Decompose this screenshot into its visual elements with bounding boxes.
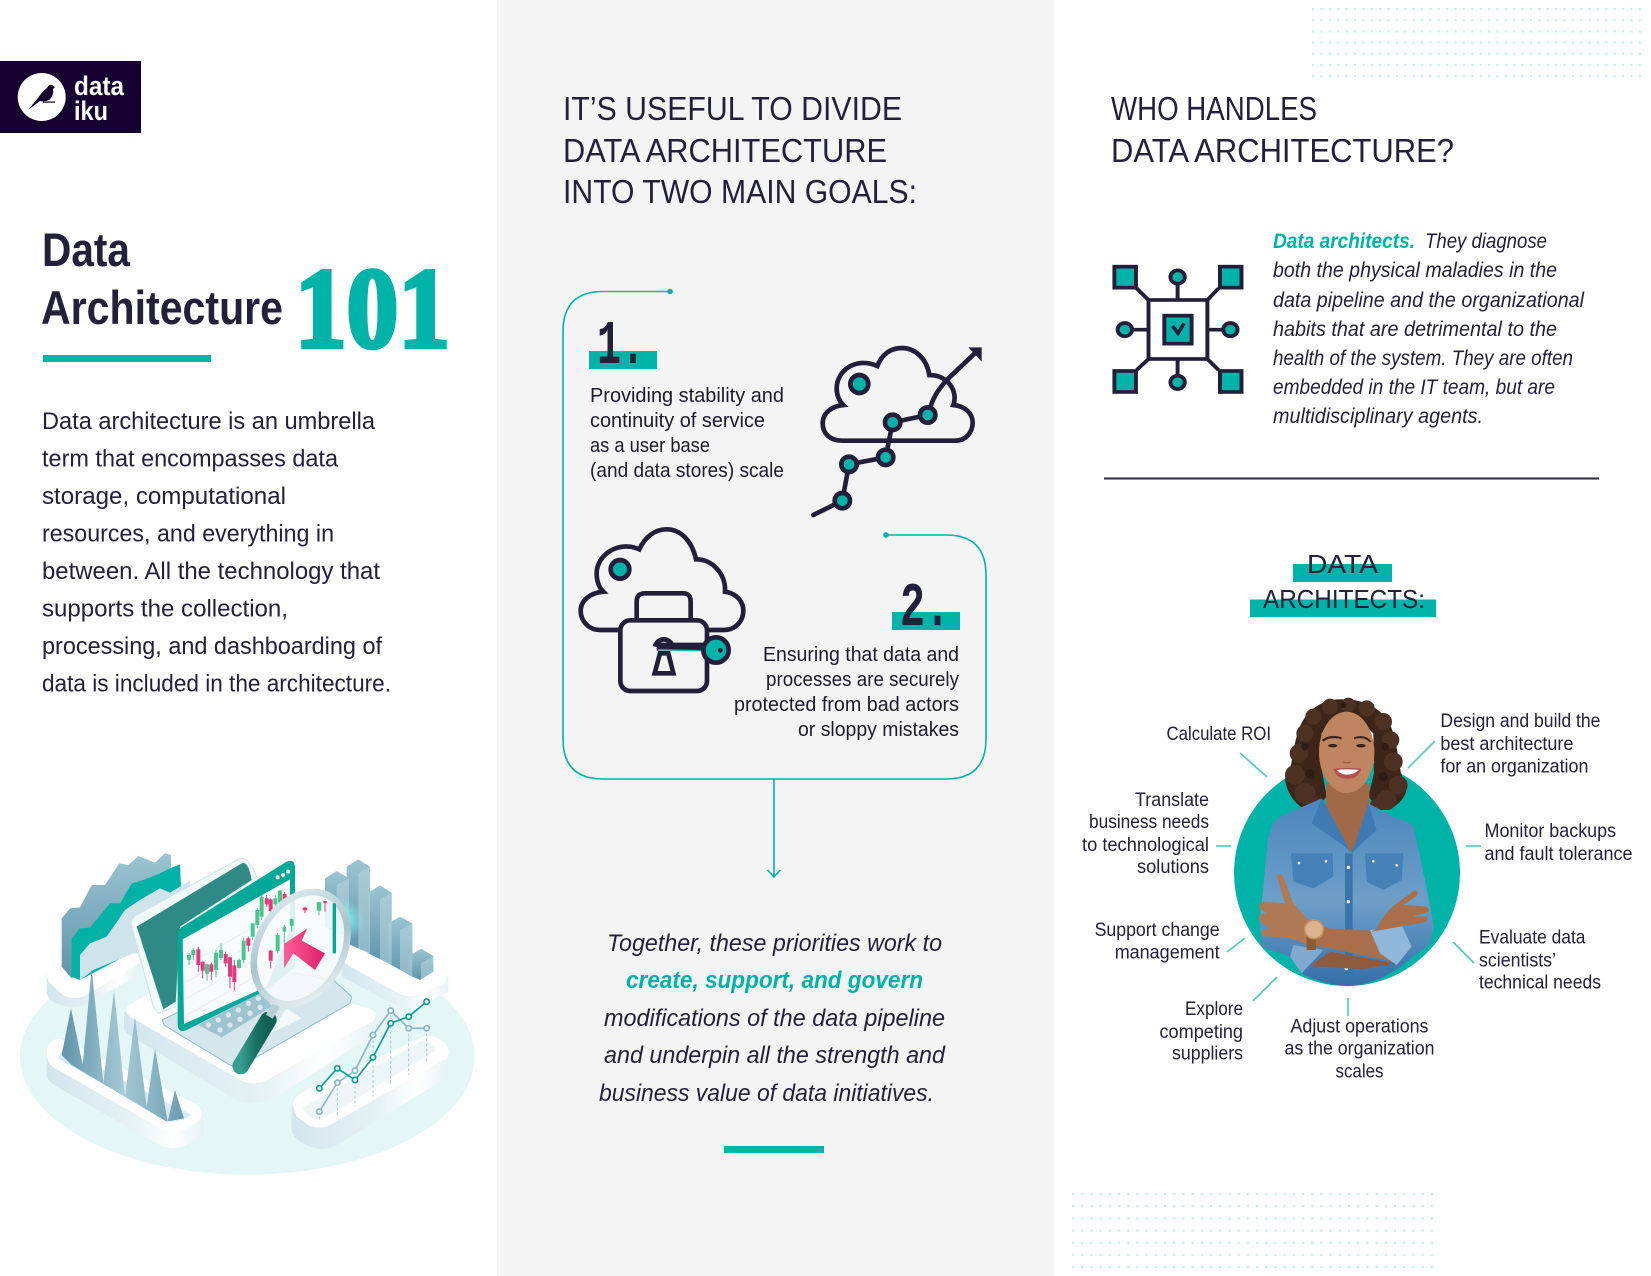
heading: two main goals xyxy=(563,91,917,211)
label: design and build: Design and build the xyxy=(1440,710,1600,732)
callout lines xyxy=(1216,741,1481,1016)
label: translate business needs: Translate xyxy=(1135,789,1209,811)
data architects description: multidisciplinary agents. xyxy=(1273,405,1483,428)
title xyxy=(41,223,450,372)
title: 101 xyxy=(295,245,450,372)
summary text: and underpin all the strength and xyxy=(604,1042,946,1069)
label: adjust operations: Adjust operations xyxy=(1290,1016,1429,1038)
label: translate business needs xyxy=(1082,789,1209,878)
panel: two main goals xyxy=(563,91,986,1153)
intro text: resources, and everything in xyxy=(42,520,334,548)
intro text: supports the collection, xyxy=(42,596,288,622)
portrait: data architect in teal circle xyxy=(1234,698,1460,986)
heading: data architects: ARCHITECTS: xyxy=(1263,584,1425,614)
label: explore competing suppliers: Explore xyxy=(1185,998,1243,1020)
summary text xyxy=(599,930,946,1107)
title: Architecture xyxy=(41,281,283,334)
icon: cloud with rising line xyxy=(813,347,982,515)
intro text: between. All the technology that xyxy=(42,558,380,585)
data architects description: Data architects. xyxy=(1273,230,1415,253)
summary underline xyxy=(724,1146,824,1153)
logo xyxy=(0,61,141,133)
panel: left intro xyxy=(0,61,475,1175)
intro text: storage, computational xyxy=(42,483,286,510)
summary text: create, support, and govern xyxy=(626,967,923,994)
intro text: term that encompasses data xyxy=(42,446,338,472)
summary text: Together, these priorities work to xyxy=(607,930,942,957)
intro text: processing, and dashboarding of xyxy=(42,633,382,660)
data architects description: embedded in the IT team, but are xyxy=(1273,376,1555,399)
label: design and build: for an organization xyxy=(1440,756,1588,778)
heading: two main goals: IT’S USEFUL TO DIVIDE xyxy=(563,91,902,128)
label: translate business needs: to technological xyxy=(1082,834,1209,856)
dot pattern: bottom xyxy=(1072,1193,1440,1276)
goal 2 text: or sloppy mistakes xyxy=(798,718,959,741)
label: calculate ROI: Calculate ROI xyxy=(1166,723,1271,745)
data architects description: They diagnose xyxy=(1425,230,1547,253)
goal 1 text: Providing stability and xyxy=(590,384,784,407)
data architects description: health of the system. They are often xyxy=(1273,347,1573,370)
goal 2 text: protected from bad actors xyxy=(734,693,959,716)
label: evaluate data scientists: Evaluate data xyxy=(1479,927,1586,949)
label: explore competing suppliers: competing xyxy=(1160,1021,1243,1043)
goal 1 number: 1. xyxy=(597,311,645,382)
goal 2 text xyxy=(734,643,960,741)
label: monitor backups: and fault tolerance xyxy=(1484,843,1632,865)
intro text: data is included in the architecture. xyxy=(42,670,391,698)
panel: who handles data architecture xyxy=(1082,91,1632,1082)
goal 1 text: as a user base xyxy=(590,434,710,457)
label: support change management xyxy=(1095,919,1220,964)
title: Data xyxy=(42,223,131,276)
heading: who handles xyxy=(1111,91,1454,170)
label: monitor backups: Monitor backups xyxy=(1484,820,1616,842)
data architects description: habits that are detrimental to the xyxy=(1273,318,1557,341)
heading: data architects: DATA xyxy=(1307,549,1379,579)
label: translate business needs: business needs xyxy=(1089,811,1209,833)
goal 2 number: 2. xyxy=(900,573,950,644)
goal 1 text: continuity of service xyxy=(590,409,765,432)
title underline xyxy=(43,355,211,362)
label: evaluate data scientists: scientists’ xyxy=(1479,950,1556,972)
label: evaluate data scientists xyxy=(1479,927,1601,994)
label: translate business needs: solutions xyxy=(1137,856,1209,878)
intro text xyxy=(42,408,391,698)
summary text: business value of data initiatives. xyxy=(599,1080,934,1107)
label: design and build: best architecture xyxy=(1440,733,1573,755)
icon: network chip xyxy=(1114,267,1241,392)
goal 1 text: (and data stores) scale xyxy=(590,459,784,482)
panel: center background xyxy=(497,0,1054,1276)
label: support change management: Support change xyxy=(1095,919,1220,941)
label: evaluate data scientists: technical needs xyxy=(1479,972,1601,994)
heading: data architects xyxy=(1250,549,1436,617)
dot pattern: top right xyxy=(1312,8,1647,86)
label: explore competing suppliers: suppliers xyxy=(1172,1043,1243,1065)
icon: cloud with padlock and key xyxy=(581,529,743,691)
summary text: modifications of the data pipeline xyxy=(604,1005,945,1032)
label: adjust operations xyxy=(1284,1016,1434,1082)
logo: iku xyxy=(74,96,108,126)
label: support change management: management xyxy=(1115,942,1220,964)
label: adjust operations: scales xyxy=(1336,1060,1384,1082)
heading: who handles: WHO HANDLES xyxy=(1111,91,1317,128)
heading: two main goals: INTO TWO MAIN GOALS: xyxy=(563,174,917,211)
goal 2 text: Ensuring that data and xyxy=(763,643,959,666)
label: explore competing suppliers xyxy=(1160,998,1243,1065)
data architects description: both the physical maladies in the xyxy=(1273,259,1557,282)
heading: two main goals: DATA ARCHITECTURE xyxy=(563,133,887,170)
heading: who handles: DATA ARCHITECTURE? xyxy=(1111,133,1454,170)
goal 1 text xyxy=(590,384,784,482)
goal 2 text: processes are securely xyxy=(766,668,960,691)
label: adjust operations: as the organization xyxy=(1284,1038,1434,1060)
logo: data xyxy=(74,71,125,101)
illustration: isometric laptop and charts xyxy=(20,853,475,1175)
data architects description: data pipeline and the organizational xyxy=(1273,289,1585,312)
intro text: Data architecture is an umbrella xyxy=(42,408,375,435)
label: design and build xyxy=(1440,710,1600,778)
data architects description xyxy=(1273,230,1585,428)
label: monitor backups xyxy=(1484,820,1632,865)
frame connector with arrow xyxy=(563,290,986,877)
